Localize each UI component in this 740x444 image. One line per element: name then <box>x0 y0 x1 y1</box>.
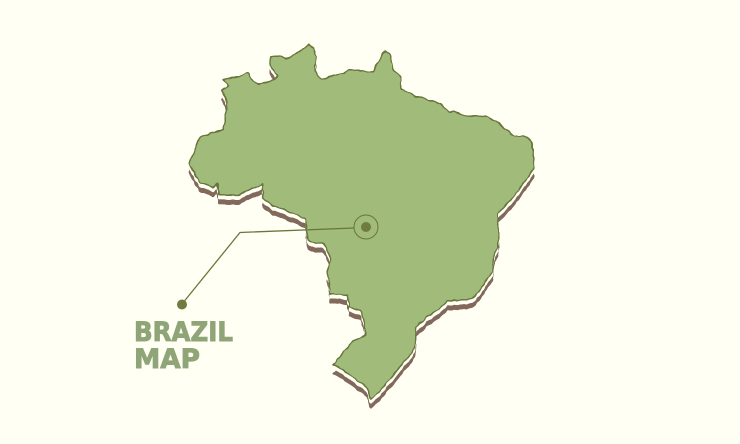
map: Brazil with layered shadow <box>190 45 533 407</box>
label: Brazil Map <box>134 317 233 375</box>
map shadow gap <box>190 49 533 402</box>
label: Brazil Map: MAP <box>134 344 200 375</box>
leader line <box>182 228 354 304</box>
leader line end dot <box>177 300 187 310</box>
map body <box>190 45 533 398</box>
map shadow <box>190 54 533 407</box>
label: Brazil Map: BRAZIL <box>134 317 233 348</box>
map outline <box>190 45 533 398</box>
location marker <box>354 215 378 239</box>
